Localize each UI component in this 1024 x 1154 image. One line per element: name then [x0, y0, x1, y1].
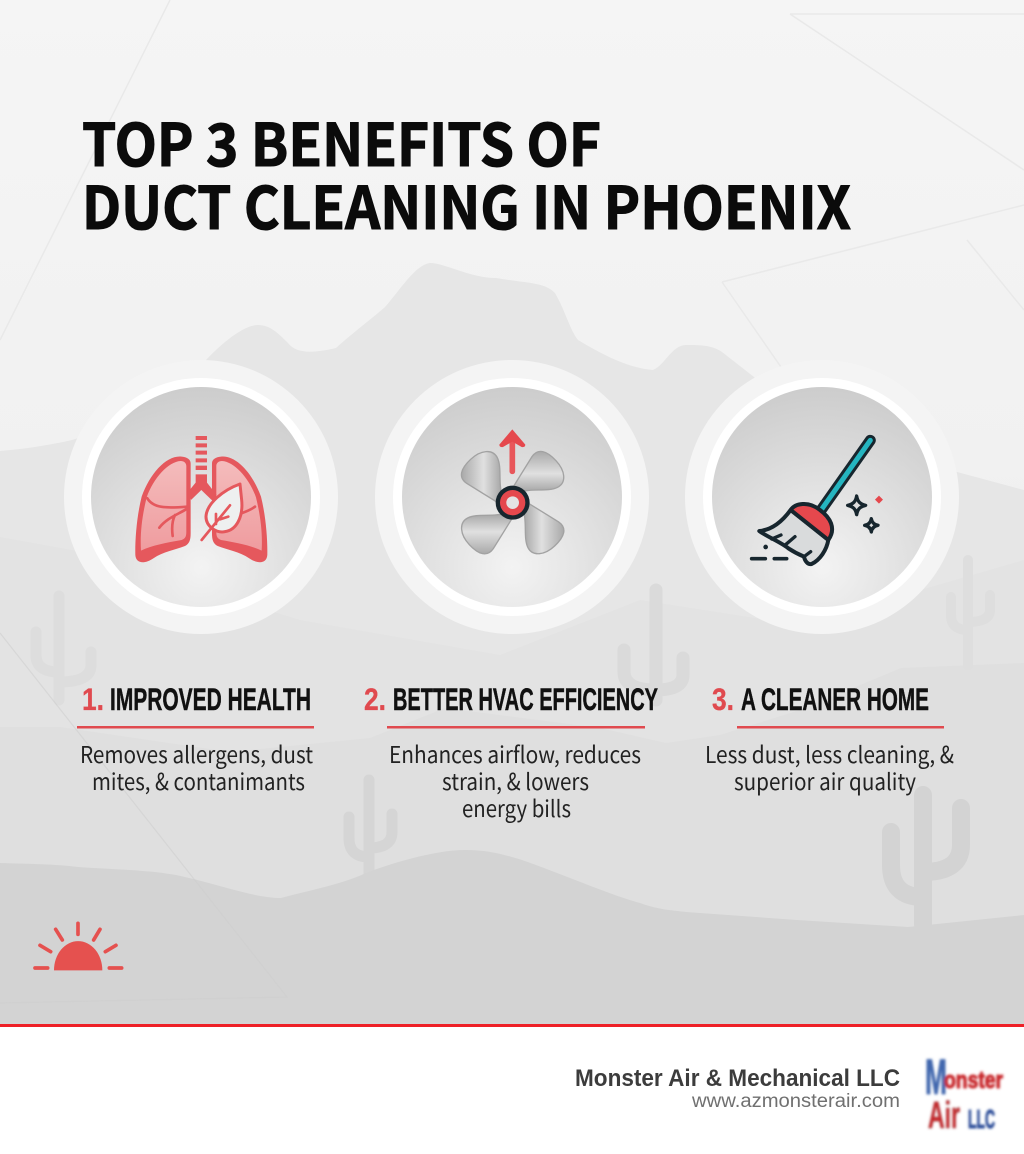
logo: monster air: LLC: [968, 1104, 995, 1134]
panel: a cleaner home: [685, 360, 959, 797]
footer: company name and website: Monster Air & Mechanical LLC: [575, 1065, 900, 1092]
cacti silhouettes: [36, 560, 990, 925]
faint foreground outline: [0, 633, 287, 1003]
logo: monster air: Air: [928, 1095, 960, 1137]
icon: broom with sparkles: [752, 440, 883, 564]
footer band: [0, 1024, 1024, 1154]
underline: improved health: [77, 726, 314, 728]
underline: a cleaner home: [737, 726, 944, 728]
icon: lungs with leaf: [135, 436, 267, 562]
description: better hvac efficiency: energy bills: [462, 790, 571, 824]
title: TOP 3 BENEFITS OF: [82, 98, 601, 183]
heading: a cleaner home: [712, 681, 929, 717]
heading: a cleaner home: 3.: [712, 681, 734, 717]
logo: monster air: M: [925, 1049, 947, 1105]
badge circle: hvac: [375, 360, 649, 634]
description: improved health: mites, & contanimants: [92, 763, 305, 797]
panel: improved health: [64, 360, 338, 797]
heading: improved health: [82, 681, 311, 717]
logo: monster air: [925, 1049, 1003, 1137]
heading: better hvac efficiency: BETTER HVAC EFFICIENCY: [393, 681, 658, 717]
badge circle: health: [64, 360, 338, 634]
heading: a cleaner home: A CLEANER HOME: [741, 681, 929, 717]
icon: fan with up arrow: [461, 429, 564, 554]
footer: company name and website: [575, 1065, 900, 1112]
description: a cleaner home: superior air quality: [734, 763, 916, 797]
badge circle: cleaner home: [685, 360, 959, 634]
heading: improved health: IMPROVED HEALTH: [110, 681, 311, 717]
desert mountains and hills: [0, 263, 1024, 1027]
description: better hvac efficiency: [389, 736, 641, 824]
title: DUCT CLEANING IN PHOENIX: [82, 161, 851, 246]
underline: better hvac efficiency: [387, 726, 645, 728]
footer: company name and website: www.azmonsterair.com: [691, 1091, 900, 1112]
heading: better hvac efficiency: [364, 681, 658, 717]
description: better hvac efficiency: Enhances airflow, reduces: [389, 736, 641, 770]
description: a cleaner home: [705, 736, 954, 797]
heading: improved health: 1.: [82, 681, 104, 717]
heading: better hvac efficiency: 2.: [364, 681, 386, 717]
description: improved health: Removes allergens, dust: [80, 736, 313, 770]
description: a cleaner home: Less dust, less cleaning, &: [705, 736, 954, 770]
panel: better hvac efficiency: [364, 360, 658, 824]
foreground dune: [0, 850, 1024, 1027]
logo: monster air: onster: [944, 1067, 1003, 1094]
description: improved health: [80, 736, 313, 797]
title: [82, 98, 851, 246]
description: better hvac efficiency: strain, & lowers: [442, 763, 589, 797]
icon: sun: [35, 923, 122, 970]
